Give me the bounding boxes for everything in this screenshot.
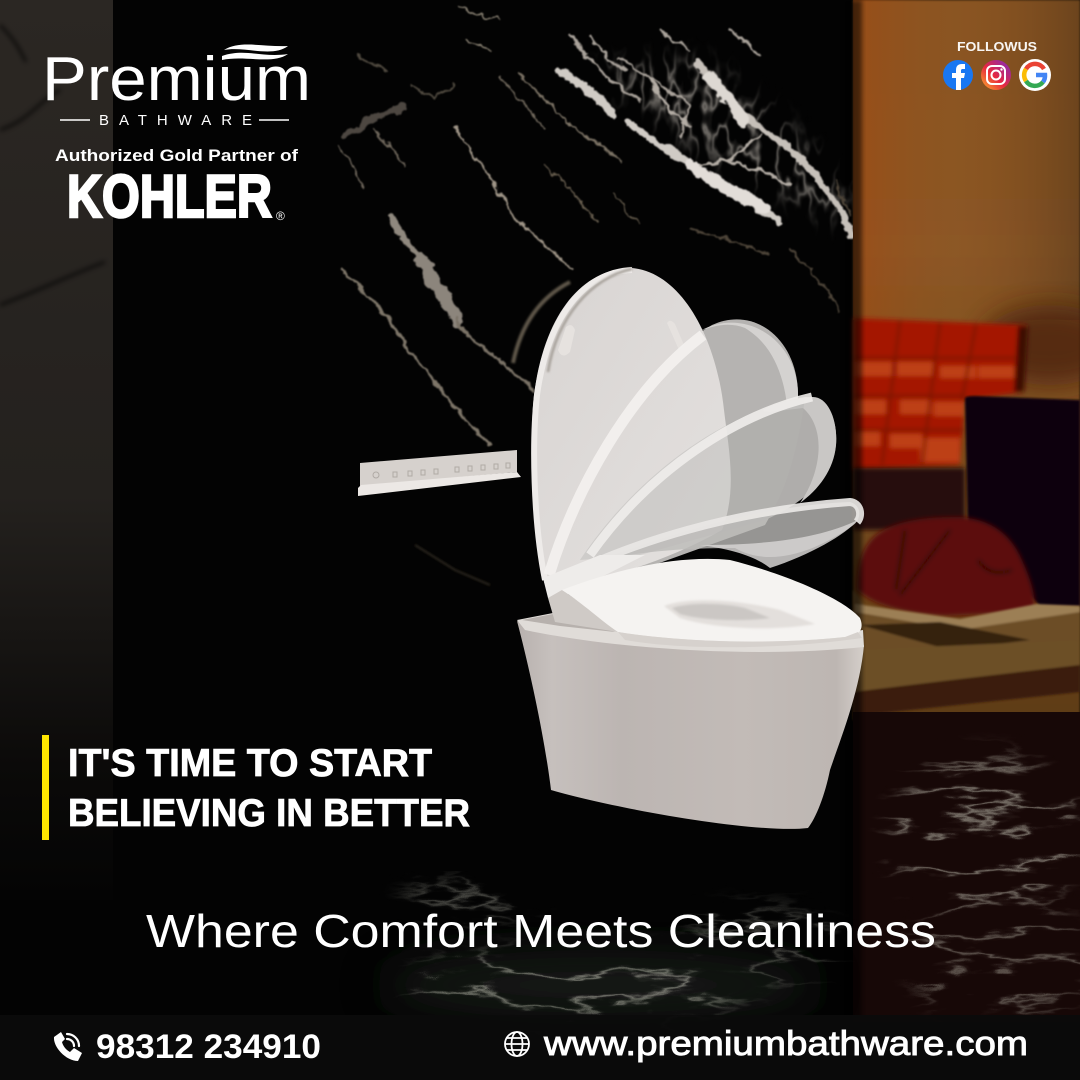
text: authorized partner: Authorized Gold Partner of <box>55 146 298 165</box>
icon: instagram <box>981 60 1011 90</box>
lid ghost far <box>547 319 798 590</box>
bowl rim <box>517 613 864 652</box>
panel: footer band <box>0 1015 1080 1080</box>
second white band <box>698 63 850 235</box>
heading: believing in better: BELIEVING IN BETTER <box>68 792 470 835</box>
icon: phone <box>54 1032 82 1061</box>
icon: logo water waves <box>222 45 288 60</box>
main lid <box>532 268 731 590</box>
dark armchair <box>965 396 1080 606</box>
tray and table <box>853 590 1080 716</box>
text: phone number: 98312 234910 <box>96 1028 321 1066</box>
long thin veins <box>455 128 573 270</box>
seat hinge <box>548 590 618 632</box>
panel: left grey marble strip <box>0 0 113 900</box>
logo wordmark: Premium <box>42 45 311 114</box>
bowl <box>517 621 864 829</box>
marble web texture <box>604 48 853 232</box>
logo subtitle: BATHWARE <box>99 112 252 129</box>
main white band <box>560 70 780 222</box>
icon: google <box>1019 59 1051 91</box>
red sofa <box>853 318 1028 470</box>
accent bar <box>42 735 49 840</box>
text: follow us: FOLLOWUS <box>957 40 1037 54</box>
lid swing bands <box>549 335 703 575</box>
illustration: toilet with lid in motion <box>517 268 864 829</box>
logo: Kohler: KOHLER <box>67 163 272 230</box>
text: website: www.premiumbathware.com <box>543 1025 1028 1063</box>
lid ghost middle <box>580 397 836 560</box>
translucent swing zones over main lid <box>580 397 805 560</box>
main lid rim highlight <box>534 270 632 580</box>
panel: dark marble floor <box>394 744 1080 1015</box>
seat <box>562 559 862 642</box>
heading: believing in better <box>68 742 470 835</box>
panel: warm room scene on right <box>844 0 1080 1022</box>
logo: Premium Bathware <box>42 45 311 129</box>
lid bumpers <box>558 325 575 356</box>
glow arc behind lid <box>513 282 570 363</box>
red handbag <box>857 517 1035 616</box>
icon: facebook <box>943 60 973 90</box>
icon: wall-mounted remote control <box>358 450 521 496</box>
dark area under sofa <box>853 468 965 530</box>
lid ghost flat <box>600 502 859 560</box>
seat opening <box>664 600 815 628</box>
heading: believing in better: IT'S TIME TO START <box>68 742 432 785</box>
logo: Kohler: ® <box>276 209 285 223</box>
icon: globe <box>505 1032 529 1056</box>
tagline: Where Comfort Meets Cleanliness <box>146 905 936 957</box>
panel: marble veins on wall <box>340 8 860 585</box>
grey blotch vein <box>391 217 431 267</box>
